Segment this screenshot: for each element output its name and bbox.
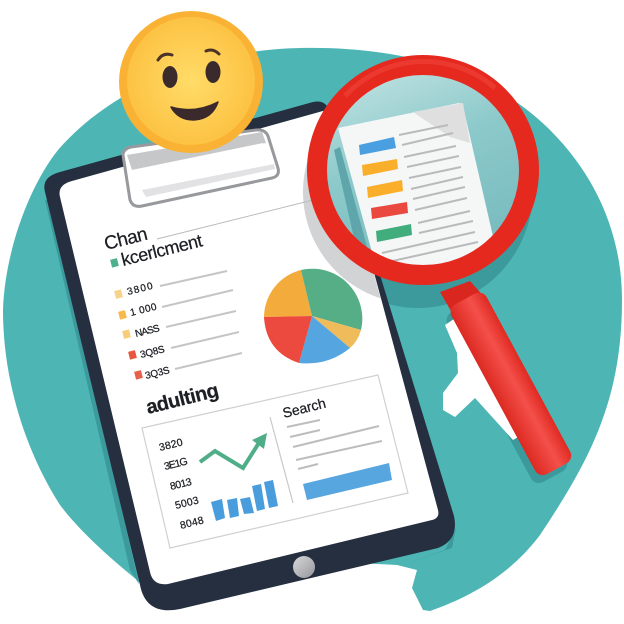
right eyebrow [206, 50, 219, 54]
value labels: 3E1G [163, 455, 189, 473]
green legend square [110, 258, 119, 268]
legend row 1 [114, 271, 227, 299]
bar chart [211, 480, 278, 521]
orange tag [362, 159, 398, 176]
legend row 1: 3800 [126, 281, 154, 298]
paper sheet [60, 109, 438, 584]
legend row 5 [134, 353, 242, 382]
legend row 2 [118, 290, 233, 320]
heading: chart: Chan [102, 224, 150, 255]
smiley emoji [119, 11, 263, 153]
value labels: 5003 [174, 494, 200, 512]
legend row 2: 1 000 [129, 302, 158, 319]
clipboard [44, 101, 456, 610]
left eyebrow [158, 54, 172, 60]
magnifier shadow on teal [303, 72, 570, 486]
right eye [206, 61, 220, 83]
clip upper band [127, 132, 266, 170]
handle [447, 289, 574, 478]
mouth [171, 102, 218, 120]
value labels [158, 436, 205, 532]
heading: search: Search [281, 395, 327, 421]
section: chart legend [102, 224, 242, 382]
clip slot [132, 143, 272, 187]
blue tag [359, 137, 396, 155]
legend row 3: NASS [134, 323, 161, 340]
green tag [376, 224, 412, 242]
left eye [162, 66, 178, 88]
amber tag [367, 180, 403, 198]
clipboard board [44, 101, 455, 610]
document inside lens [334, 103, 493, 265]
lens [326, 72, 524, 274]
blue summary bar [303, 463, 392, 500]
value labels: 8013 [169, 476, 193, 493]
white patch beside the handle [443, 315, 530, 440]
page fold [413, 103, 470, 143]
clipboard clip [123, 130, 278, 206]
thin header rule [157, 192, 345, 239]
home button [293, 556, 315, 578]
panel: analytics box [142, 375, 408, 548]
value labels: 3820 [158, 436, 184, 454]
clipboard shadow [45, 200, 456, 584]
clip lower band [142, 164, 275, 197]
document text lines [382, 125, 478, 262]
handle neck [440, 281, 487, 318]
magnifier shadow on paper [303, 161, 380, 298]
document page [338, 103, 493, 265]
magnifying glass [317, 61, 574, 478]
panel frame [142, 375, 408, 548]
red ring [317, 65, 529, 275]
red tag [371, 202, 408, 219]
panel divider [270, 417, 293, 503]
legend row 5: 3Q3S [144, 365, 171, 382]
value labels: 8048 [179, 514, 205, 532]
subheading: kcerlcment [119, 230, 205, 270]
legend row 4: 3Q8S [139, 344, 166, 361]
legend row 4 [128, 332, 239, 361]
legend row 3 [122, 311, 236, 340]
trend line with arrow [200, 433, 267, 468]
ring highlight [345, 61, 495, 96]
heading: auditing: adulting [144, 380, 221, 419]
pie chart [264, 269, 362, 363]
text lines [287, 420, 382, 469]
document shadow [334, 147, 367, 247]
emoji face [127, 17, 255, 145]
